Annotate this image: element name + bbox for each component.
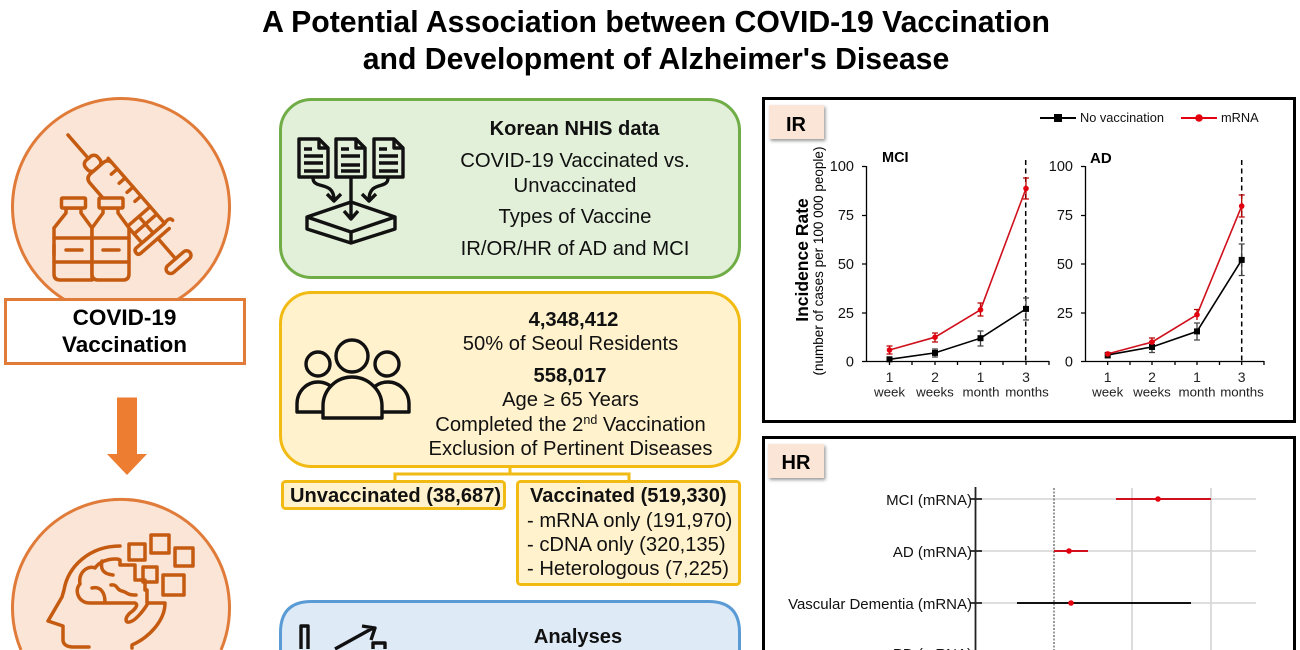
tag: IR xyxy=(769,105,824,139)
text: NHIS data points xyxy=(460,118,690,260)
text: population counts: 558,017 xyxy=(534,365,606,387)
text: NHIS data points: Types of Vaccine xyxy=(499,206,651,228)
chart: MCI incidence: 0 xyxy=(846,354,854,370)
text: population counts: Vaccination xyxy=(597,414,706,436)
chart: MCI incidence: 50 xyxy=(838,257,854,273)
chart: MCI incidence: 1 xyxy=(977,369,985,385)
chart: MCI incidence: week xyxy=(873,384,905,400)
text: population counts: Completed the 2 xyxy=(435,414,583,436)
label: COVID-19 Vaccination: COVID-19 xyxy=(73,305,176,330)
panel: IR xyxy=(764,98,1294,422)
text: NHIS data points: Korean NHIS data xyxy=(490,118,660,140)
row: MCI (mRNA): MCI (mRNA) xyxy=(886,492,972,509)
row: AD (mRNA): AD (mRNA) xyxy=(893,544,972,561)
chart: MCI incidence xyxy=(830,150,1049,400)
chart: MCI incidence: 100 xyxy=(830,159,854,175)
chart: AD incidence xyxy=(1049,150,1264,400)
chart: AD incidence: 1 xyxy=(1104,369,1112,385)
arrow: down xyxy=(107,398,147,475)
text: NHIS data points: COVID-19 Vaccinated vs. xyxy=(460,150,690,172)
text: population counts xyxy=(429,309,712,460)
legend: mRNA xyxy=(1221,110,1259,125)
label: COVID-19 Vaccination xyxy=(6,300,244,364)
chart: MCI incidence: month xyxy=(963,384,999,400)
text: population counts: Exclusion of Pertinent Diseases xyxy=(429,438,712,460)
connector: population split xyxy=(395,467,629,481)
chart: AD incidence: AD xyxy=(1090,150,1112,167)
chart: hazard ratio forest plot xyxy=(788,487,1256,650)
chart: MCI incidence: 1 xyxy=(886,369,894,385)
panel: Korean NHIS data xyxy=(280,100,740,278)
text: NHIS data points: Unvaccinated xyxy=(514,175,636,197)
chart: AD incidence: month xyxy=(1179,384,1215,400)
chart: AD incidence: 100 xyxy=(1049,159,1073,175)
heading: Analyses: Analyses xyxy=(534,626,622,648)
chart: AD incidence: 2 xyxy=(1148,369,1156,385)
tag: HR: HR xyxy=(782,452,811,474)
panel: Analyses xyxy=(280,602,740,650)
title: A Potential Association between COVID-19 Vaccination xyxy=(262,6,1050,39)
box: Vaccinated xyxy=(518,482,740,584)
icon: documents into database xyxy=(299,139,403,243)
legend xyxy=(1040,110,1259,125)
chart: MCI incidence: MCI xyxy=(882,150,909,166)
axis title: Incidence Rate: Incidence Rate xyxy=(792,198,812,322)
icon circle: COVID-19 vaccination xyxy=(12,98,230,316)
panel: study population xyxy=(280,292,740,466)
axis title: Incidence Rate: (number of cases per 100 000 people) xyxy=(811,147,826,375)
chart: AD incidence: weeks xyxy=(1132,384,1171,400)
chart: MCI incidence: 3 xyxy=(1022,369,1030,385)
icon: rising chart xyxy=(301,626,385,649)
text: population counts: nd xyxy=(583,413,597,427)
chart: AD incidence: 0 xyxy=(1065,354,1073,370)
title: and Development of Alzheimer's Disease xyxy=(363,43,949,76)
chart: MCI incidence: months xyxy=(1005,384,1049,400)
text: NHIS data points: IR/OR/HR of AD and MCI xyxy=(461,238,689,260)
chart: AD incidence: 1 xyxy=(1193,369,1201,385)
text: population counts: Age ≥ 65 Years xyxy=(502,389,639,411)
icon: syringe xyxy=(48,120,199,283)
icon: head with fragmenting brain xyxy=(48,535,193,648)
box: Unvaccinated: Unvaccinated (38,687) xyxy=(290,485,501,507)
tag: HR xyxy=(768,444,824,478)
box: Vaccinated: - cDNA only (320,135) xyxy=(527,534,726,556)
chart: AD incidence: 50 xyxy=(1057,257,1073,273)
chart: AD incidence: 75 xyxy=(1057,208,1073,224)
icon circle: Alzheimer's brain xyxy=(12,499,230,650)
row: AD (mRNA) xyxy=(893,544,1088,561)
legend: No vaccination xyxy=(1080,110,1164,125)
chart: MCI incidence: weeks xyxy=(915,384,954,400)
icon: people xyxy=(297,340,409,418)
title xyxy=(262,6,1050,76)
chart: AD incidence: 25 xyxy=(1057,306,1073,322)
axis title: Incidence Rate xyxy=(792,147,826,375)
chart: AD incidence: week xyxy=(1091,384,1124,400)
box: Vaccinated: Vaccinated (519,330) xyxy=(530,485,727,507)
panel: HR xyxy=(764,438,1294,650)
chart: AD incidence: months xyxy=(1220,384,1264,400)
label: COVID-19 Vaccination: Vaccination xyxy=(62,332,187,357)
box: Vaccinated: - Heterologous (7,225) xyxy=(527,558,729,580)
row: MCI (mRNA) xyxy=(886,492,1211,509)
row: Vascular Dementia (mRNA) xyxy=(788,596,1191,613)
row: Vascular Dementia (mRNA): Vascular Dementia (mRNA) xyxy=(788,596,972,613)
box: Vaccinated: - mRNA only (191,970) xyxy=(527,510,732,532)
chart: MCI incidence: 2 xyxy=(931,369,939,385)
icon: vials xyxy=(54,198,129,280)
text: population counts: 4,348,412 xyxy=(529,309,618,331)
chart: AD incidence: 3 xyxy=(1238,369,1246,385)
chart: MCI incidence: 25 xyxy=(838,306,854,322)
text: population counts: 50% of Seoul Residents xyxy=(463,333,678,355)
chart: MCI incidence: 75 xyxy=(838,208,854,224)
tag: IR: IR xyxy=(786,114,807,136)
